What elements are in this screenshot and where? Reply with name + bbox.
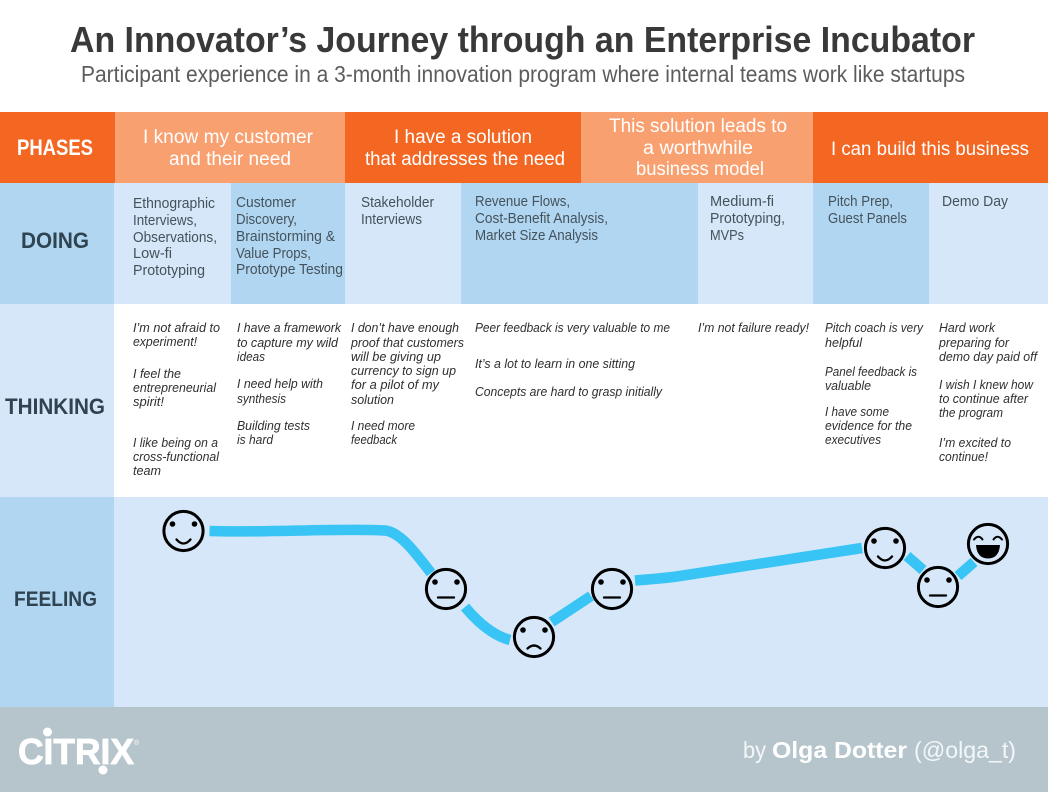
thoughts: column 3: solution (351, 393, 394, 407)
phase 3 label (609, 116, 787, 180)
thoughts: column 6: I have some (825, 405, 889, 419)
heading: thinking: THINKING (5, 394, 105, 419)
panel: feeling row (0, 497, 1048, 707)
doing: medium-fi prototyping: Medium-fi (710, 194, 774, 210)
thoughts: column 3: for a pilot of my (351, 378, 440, 392)
doing: pitch prep: Guest Panels (828, 211, 907, 227)
doing: pitch prep (828, 194, 907, 227)
icon: happy face 5 (865, 528, 905, 568)
credit line: (@olga_t) (914, 737, 1016, 763)
thoughts: column 1: team (133, 464, 161, 478)
icon: neutral face 6 (918, 567, 958, 607)
panel: phases row (0, 112, 1048, 183)
thoughts: column 2: I have a framework (237, 321, 342, 335)
doing: medium-fi prototyping: Prototyping, (710, 211, 785, 227)
icon: sad face (514, 617, 554, 657)
thoughts: column 1: entrepreneurial (133, 381, 217, 395)
doing: demo day: Demo Day (942, 194, 1009, 210)
phase 2 label (365, 127, 565, 170)
thoughts: column 7: to continue after (939, 392, 1029, 406)
phase 2 label: I have a solution (394, 127, 532, 148)
thoughts: column 3: feedback (351, 433, 398, 447)
thoughts: column 6: helpful (825, 336, 863, 350)
thoughts: column 6: executives (825, 433, 881, 447)
doing: revenue flows: Revenue Flows, (475, 194, 570, 210)
phase 3 label: This solution leads to (609, 116, 787, 137)
title: An Innovator’s Journey through an Enterprise Incubator (70, 19, 975, 60)
phase 1 label: and their need (169, 149, 291, 170)
doing: ethnographic: Prototyping (133, 263, 205, 279)
thoughts: column 7: I wish I knew how (939, 378, 1034, 392)
thoughts: column 4: Concepts are hard to grasp initially (475, 385, 663, 399)
thoughts: column 1: I like being on a (133, 436, 218, 450)
logo: Citrix: CITRIX (18, 731, 134, 772)
phase 3 label: a worthwhile (643, 138, 753, 159)
doing: ethnographic: Low-fi (133, 246, 172, 262)
thoughts: column 1: I feel the (133, 367, 181, 381)
doing: ethnographic (133, 196, 217, 279)
phase 1 label (143, 127, 314, 170)
thoughts: column 7: continue! (939, 450, 989, 464)
doing: pitch prep: Pitch Prep, (828, 194, 893, 210)
phase 1 label: I know my customer (143, 127, 314, 148)
thoughts: column 2: I need help with (237, 377, 323, 391)
thoughts: column 5: I’m not failure ready! (698, 321, 810, 335)
thoughts: column 1: spirit! (133, 395, 165, 409)
doing: stakeholder interviews (361, 195, 434, 228)
thoughts: column 4 (475, 321, 670, 399)
thoughts: column 3: I don’t have enough (351, 321, 459, 335)
thoughts: column 2: synthesis (237, 392, 286, 406)
thoughts: column 2: is hard (237, 433, 274, 447)
subtitle: Participant experience in a 3-month innovation program where internal teams work like startups (81, 61, 965, 87)
doing: ethnographic: Ethnographic (133, 196, 215, 212)
credit line (743, 737, 1016, 763)
thoughts: column 1: experiment! (133, 335, 198, 349)
doing: revenue flows (475, 194, 608, 244)
doing: ethnographic: Interviews, (133, 213, 197, 229)
thoughts: column 1: I’m not afraid to (133, 321, 220, 335)
thoughts: column 6: valuable (825, 379, 871, 393)
thoughts: column 7: I’m excited to (939, 436, 1011, 450)
thoughts: column 7: demo day paid off (939, 350, 1039, 364)
doing: customer discovery: Discovery, (236, 212, 297, 228)
doing: customer discovery: Value Props, (236, 246, 311, 262)
panel: doing row (0, 183, 1048, 304)
thoughts: column 2: to capture my wild (237, 336, 339, 350)
icon: neutral face 2 (426, 569, 466, 609)
icon: neutral face 4 (592, 569, 632, 609)
thoughts: column 7: the program (939, 406, 1003, 420)
doing: ethnographic: Observations, (133, 230, 217, 246)
credit line: by (743, 737, 766, 763)
thoughts: column 3: proof that customers (350, 336, 464, 350)
doing: stakeholder interviews: Interviews (361, 212, 422, 228)
thoughts: column 3: currency to sign up (351, 364, 456, 378)
doing: medium-fi prototyping (710, 194, 785, 244)
credit line: Olga Dotter (772, 737, 907, 763)
thoughts: column 6 (825, 321, 924, 447)
thoughts: column 7 (938, 321, 1039, 464)
thoughts: column 1 (133, 321, 220, 478)
thoughts: column 6: evidence for the (825, 419, 912, 433)
panel: footer (0, 707, 1048, 792)
doing: revenue flows: Market Size Analysis (475, 228, 598, 244)
phase 2 label: that addresses the need (365, 149, 565, 170)
doing: medium-fi prototyping: MVPs (710, 228, 744, 244)
thoughts: column 2: Building tests (237, 419, 310, 433)
thoughts: column 4: It’s a lot to learn in one sitting (475, 357, 635, 371)
thoughts: column 2 (237, 321, 342, 447)
thoughts: column 1: cross-functional (133, 450, 220, 464)
doing: customer discovery: Prototype Testing (236, 262, 343, 278)
thoughts: column 7: Hard work (939, 321, 996, 335)
icon: laughing face (968, 524, 1008, 564)
chart: emotion curve (210, 530, 974, 640)
thoughts: column 7: preparing for (938, 336, 1010, 350)
doing: revenue flows: Cost-Benefit Analysis, (475, 211, 608, 227)
heading: phases: PHASES (17, 135, 93, 160)
logo: Citrix: ® (134, 739, 140, 747)
icon: happy face 1 (164, 511, 203, 551)
thoughts: column 6: Pitch coach is very (825, 321, 924, 335)
thoughts: column 6: Panel feedback is (825, 365, 917, 379)
doing: customer discovery: Customer (236, 195, 296, 211)
phase 3 label: business model (636, 159, 764, 180)
thoughts: column 2: ideas (237, 350, 265, 364)
thoughts: column 4: Peer feedback is very valuable to me (475, 321, 670, 335)
doing: customer discovery: Brainstorming & (236, 229, 335, 245)
thoughts: column 3 (350, 321, 464, 447)
doing: stakeholder interviews: Stakeholder (361, 195, 434, 211)
heading: feeling: FEELING (14, 588, 97, 611)
doing: customer discovery (236, 195, 343, 278)
panel: thinking row (0, 304, 1039, 497)
phase 4 label: I can build this business (831, 139, 1029, 160)
heading: doing: DOING (21, 228, 89, 253)
thoughts: column 3: will be giving up (351, 350, 441, 364)
thoughts: column 3: I need more (351, 419, 415, 433)
